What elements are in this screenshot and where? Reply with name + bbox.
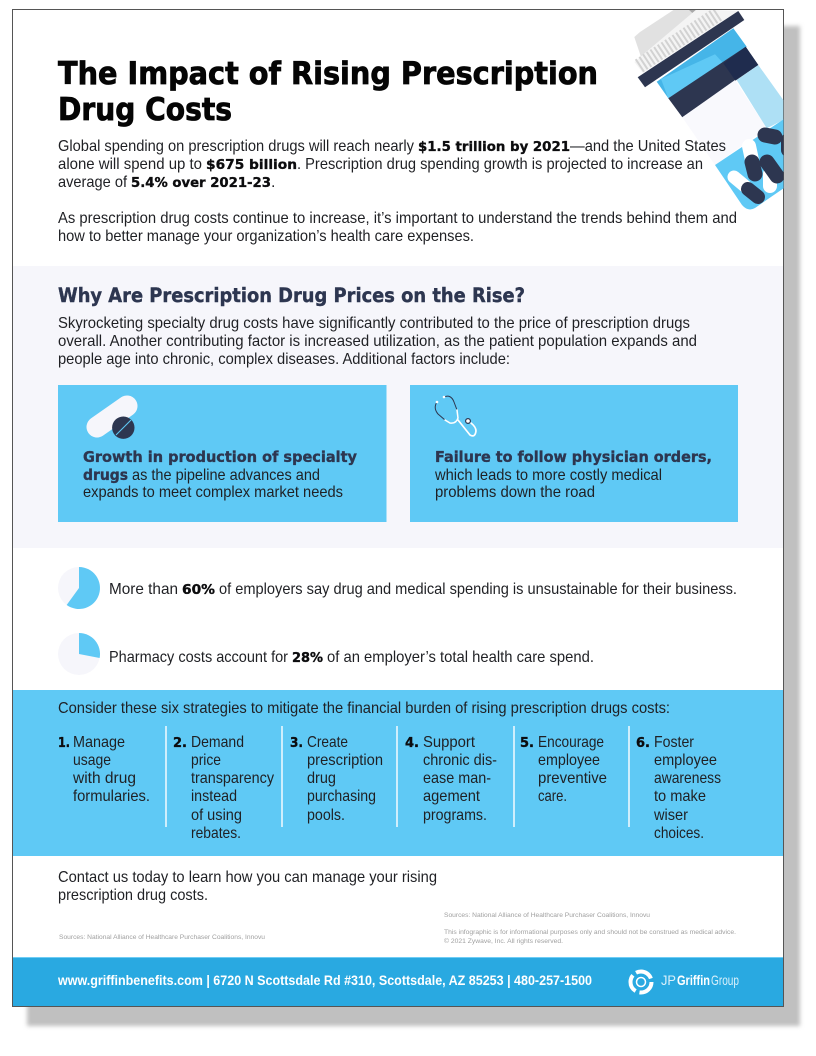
text: 60 percent statement: of employers say drug and medical spending is unsustainable for their business. — [219, 581, 737, 598]
strategy 6: to make — [654, 788, 706, 805]
intro text: alone will spend up to — [58, 156, 202, 173]
text: 28 percent statement: Pharmacy costs account for — [109, 649, 289, 666]
text: 28 percent statement: of an employer’s total health care spend. — [327, 649, 594, 666]
logo: JP Griffin Group: Group — [711, 972, 739, 988]
card: physician orders — [410, 385, 738, 522]
strategy 3: 3. — [290, 735, 303, 751]
intro text: average of — [58, 174, 128, 191]
text: physician orders: problems down the road — [435, 484, 595, 501]
intro text: —and the United States — [570, 138, 726, 155]
sources and disclaimer right: This infographic is for informational purposes only and should not be construed as medical advice. — [444, 929, 736, 936]
text: 60 percent statement: More than — [109, 581, 178, 598]
stat: 60 percent of employers — [58, 567, 737, 609]
icon: prescription bottle — [634, 9, 788, 209]
icon: pill and tablet — [97, 406, 134, 439]
sources and disclaimer right: Sources: National Alliance of Healthcare Purchaser Coalitions, Innovu — [444, 912, 650, 919]
strategy 5: employee — [538, 752, 600, 769]
title: The Impact of Rising Prescription — [58, 56, 598, 92]
strategy 2: rebates. — [191, 825, 241, 842]
text: 60 percent statement: 60% — [182, 582, 215, 598]
strategy 5 — [520, 734, 607, 805]
strategy 3: pools. — [307, 807, 345, 824]
strategy 1: with drug — [72, 770, 136, 787]
strategy 4: 4. — [405, 735, 419, 751]
strategy 3: drug — [307, 770, 336, 787]
strategy 2: of using — [191, 807, 242, 824]
text: 28 percent statement: 28% — [292, 650, 323, 666]
strategy 4: ease man- — [423, 770, 491, 787]
intro text: $675 billion — [206, 157, 297, 173]
footer contact details: www.griffinbenefits.com | 6720 N Scottsdale Rd #310, Scottsdale, AZ 85253 | 480-257-1500 — [57, 972, 592, 988]
sources left: Sources: National Alliance of Healthcare Purchaser Coalitions, Innovu — [59, 934, 265, 941]
text block: rising prices explanation — [58, 315, 697, 368]
strategy 6: awareness — [654, 770, 721, 787]
logo: JP Griffin Group: JP — [661, 972, 676, 988]
contact call to action: Contact us today to learn how you can manage your rising — [58, 869, 437, 886]
logo: JP Griffin Group: Griffin — [677, 972, 710, 988]
strategy 2 — [173, 734, 274, 842]
strategy 4: agement — [423, 788, 481, 805]
strategy 1: 1. — [58, 735, 70, 751]
strategy 4 — [405, 734, 497, 824]
strategy 3: Create — [307, 734, 348, 751]
intro text: how to better manage your organization’s health care expenses. — [58, 228, 474, 245]
heading: why are prices on the rise: Why Are Prescription Drug Prices on the Rise? — [58, 284, 525, 307]
intro text: . — [271, 174, 275, 191]
strategy 4: Support — [423, 734, 476, 751]
text: physician orders: Failure to follow physician orders, — [435, 448, 712, 466]
text block: rising prices explanation: overall. Another contributing factor is increased utilization, as the patient population expands and — [58, 333, 697, 350]
heading: strategies intro: Consider these six strategies to mitigate the financial burden of rising prescription drugs costs: — [58, 700, 670, 717]
chart: 28 percent pie — [58, 633, 100, 675]
strategy 1: Manage — [73, 734, 125, 751]
contact call to action — [58, 869, 437, 904]
title — [58, 56, 598, 128]
panel: why prices are rising — [13, 266, 783, 548]
panel: six strategies — [13, 690, 783, 856]
intro text — [58, 138, 737, 245]
card: specialty drugs — [58, 385, 386, 522]
strategy 3: prescription — [307, 752, 383, 769]
text: specialty drugs: Growth in production of specialty — [83, 448, 357, 466]
strategy 6: choices. — [654, 825, 704, 842]
strategy 1: formularies. — [73, 788, 150, 805]
strategy 6: employee — [654, 752, 717, 769]
text: specialty drugs: drugs — [83, 466, 128, 484]
strategy 1: usage — [73, 752, 111, 769]
strategy 5: Encourage — [538, 734, 604, 751]
strategy 4: programs. — [423, 807, 487, 824]
strategy 3: purchasing — [307, 788, 376, 805]
text: physician orders — [434, 448, 712, 501]
text block: rising prices explanation: people age into chronic, complex diseases. Additional factors include: — [58, 351, 510, 368]
strategy 6: Foster — [654, 734, 695, 751]
strategy 6 — [636, 734, 721, 842]
strategy 2: Demand — [191, 734, 244, 751]
strategy 2: price — [191, 752, 221, 769]
strategy 2: transparency — [191, 770, 274, 787]
footer bar — [13, 957, 783, 1006]
text: specialty drugs — [83, 448, 357, 501]
strategy 3 — [290, 734, 383, 824]
text: physician orders: which leads to more costly medical — [434, 467, 662, 484]
strategy 5: preventive — [538, 770, 607, 787]
text block: rising prices explanation: Skyrocketing specialty drug costs have significantly contributed to the price of prescription drugs — [58, 315, 690, 332]
strategy 6: wiser — [653, 807, 689, 824]
sources and disclaimer right: © 2021 Zywave, Inc. All rights reserved. — [444, 937, 563, 945]
strategy 5: care. — [538, 788, 567, 805]
sources and disclaimer right — [444, 912, 736, 945]
strategy 6: 6. — [636, 735, 650, 751]
logo: JP Griffin Group — [630, 972, 739, 992]
stat: 28 percent of spend — [58, 633, 594, 675]
icon: stethoscope — [435, 396, 476, 436]
intro text: As prescription drug costs continue to increase, it’s important to understand the trends behind them and — [58, 210, 737, 227]
text: specialty drugs: expands to meet complex market needs — [83, 484, 343, 501]
chart: 60 percent pie — [58, 567, 100, 609]
strategy 2: 2. — [173, 735, 187, 751]
strategy 5: 5. — [520, 735, 534, 751]
intro text: $1.5 trillion by 2021 — [418, 139, 570, 155]
contact call to action: prescription drug costs. — [58, 887, 208, 904]
intro text: . Prescription drug spending growth is projected to increase an — [297, 156, 703, 173]
text: 28 percent statement — [109, 649, 594, 666]
strategy 2: instead — [191, 788, 237, 805]
strategy 1 — [58, 734, 150, 805]
title: Drug Costs — [58, 92, 232, 128]
intro text: Global spending on prescription drugs will reach nearly — [58, 138, 414, 155]
strategy 4: chronic dis- — [423, 752, 497, 769]
intro text: 5.4% over 2021-23 — [131, 175, 271, 191]
text: specialty drugs: as the pipeline advances and — [132, 467, 320, 484]
